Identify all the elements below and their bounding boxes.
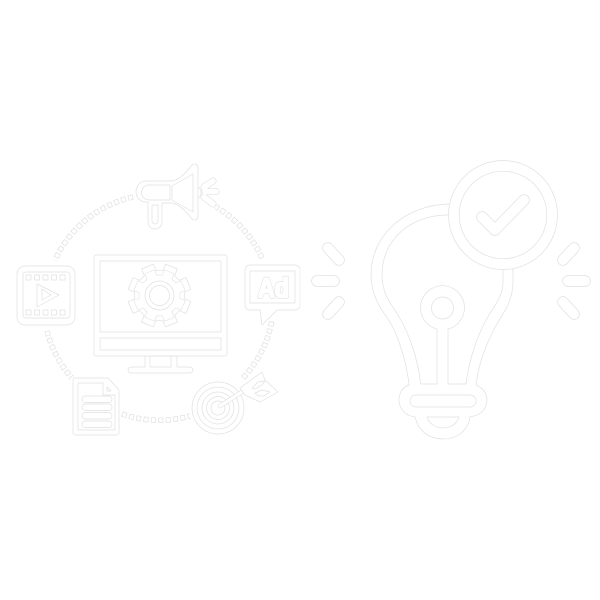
icon: check badge: [448, 160, 558, 270]
dotted ring connecting marketing icons: [47, 197, 272, 420]
rays between cycle and bulb: [317, 248, 339, 314]
icon: desktop monitor with gear: [94, 255, 227, 373]
icon: gear: [128, 264, 191, 327]
icon: target with arrow: [192, 372, 278, 434]
rays right of bulb: [563, 248, 585, 314]
icon: light bulb: [371, 160, 558, 439]
icon: Ad speech bubble: [245, 265, 300, 325]
icon: document: [73, 378, 119, 435]
icon: Ad speech bubble: Ad: [258, 273, 289, 303]
icon: Ad speech bubble: Ad: [258, 273, 289, 303]
faint edge line: [299, 267, 301, 307]
icon: megaphone: [136, 164, 216, 229]
icon: video film with play button: [17, 266, 75, 325]
